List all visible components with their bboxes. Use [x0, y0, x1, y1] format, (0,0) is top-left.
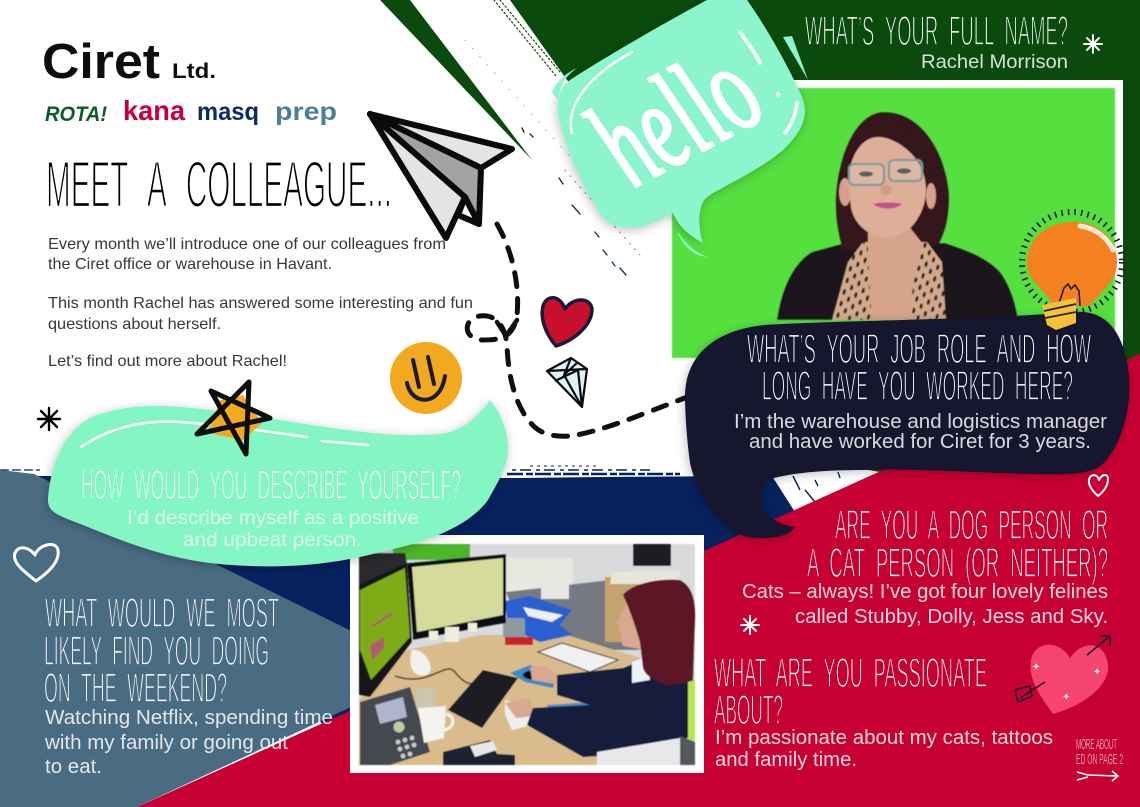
bulb glass	[1027, 222, 1117, 306]
answer: and have worked for Ciret for 3 years.	[749, 431, 1091, 453]
answer: I’m the warehouse and logistics manager	[734, 411, 1107, 433]
bulb base	[1042, 298, 1076, 330]
background shape: red triangle	[137, 354, 1140, 807]
question: weekend	[44, 589, 333, 778]
answer: I’d describe myself as a positive	[127, 507, 419, 529]
answer	[742, 581, 1108, 628]
brand logos	[45, 95, 337, 126]
icon: paper plane	[370, 114, 512, 238]
question: passionate	[714, 649, 1053, 771]
highlight	[571, 52, 632, 133]
intro text	[48, 236, 473, 370]
pink heart	[1031, 645, 1108, 714]
office photo	[359, 544, 695, 765]
bubble shape	[685, 312, 1129, 538]
bulb highlight	[1080, 226, 1113, 250]
sparkles: ✦	[1032, 662, 1040, 673]
speech bubble: describe yourself	[48, 400, 508, 566]
portrait photo	[672, 88, 1115, 358]
portrait photo frame	[664, 80, 1123, 366]
background shape: dark green corner	[510, 0, 1140, 472]
speech bubble: hello	[552, 0, 808, 257]
intro text: questions about herself.	[48, 316, 221, 333]
answer: with my family or going out	[44, 732, 288, 754]
intro text: This month Rachel has answered some interesting and fun	[48, 295, 473, 312]
answer	[127, 507, 419, 551]
answer: and family time.	[715, 749, 857, 771]
icon: star	[197, 382, 270, 454]
arrow	[1015, 636, 1110, 702]
logo: Ciret Ltd.: Ciret	[42, 35, 160, 89]
text: HOW WOULD YOU DESCRIBE YOURSELF?	[81, 461, 461, 508]
icon: asterisk white top	[1084, 35, 1102, 53]
answer	[715, 727, 1053, 771]
exclamation	[740, 32, 797, 133]
note: more on page 2	[1076, 736, 1123, 781]
answer: Watching Netflix, spending time	[45, 707, 333, 729]
arrow	[1077, 771, 1118, 781]
brand logos: ROTA!	[45, 103, 107, 126]
intro text: Every month we’ll introduce one of our colleagues from	[48, 236, 446, 253]
intro text: the Ciret office or warehouse in Havant.	[48, 256, 332, 273]
bulb rays	[1022, 212, 1122, 312]
icon: asterisk black	[38, 408, 60, 430]
bubble accent tail	[677, 230, 707, 257]
bubble highlights	[81, 422, 368, 447]
background detail: white wedge under bubble	[770, 468, 863, 512]
answer	[44, 707, 333, 778]
sparkles: ✦	[1093, 667, 1101, 678]
bubble accent left	[552, 68, 577, 100]
question: weekend: LIKELY FIND YOU DOING	[44, 627, 269, 674]
answer: to eat.	[45, 756, 102, 778]
question: full name	[805, 7, 1068, 73]
background shape: dark green sliver	[380, 0, 532, 160]
question: weekend: WHAT WOULD WE MOST	[45, 589, 279, 636]
intro text: Let’s find out more about Rachel!	[48, 353, 287, 370]
bubble shape	[558, 0, 805, 243]
background detail: wedge speckles	[793, 472, 840, 502]
icon: heart with arrow	[1015, 636, 1110, 714]
icon: red heart	[542, 298, 592, 346]
sparkles: ✦	[1062, 692, 1070, 703]
background detail: brush speckles	[465, 0, 640, 275]
office photo frame	[350, 535, 704, 773]
answer: I’m passionate about my cats, tattoos	[715, 727, 1053, 749]
background shape: navy band	[0, 476, 795, 730]
logo: Ciret Ltd.	[42, 35, 216, 89]
text: MEET A COLLEAGUE...	[46, 147, 392, 221]
arrow head on dashed path	[497, 320, 517, 336]
background shape: slate triangle	[0, 470, 430, 807]
icon: heart outline left	[14, 545, 58, 581]
heading: ON THE WEEKEND?	[44, 664, 227, 711]
bubble accent right	[783, 36, 808, 80]
note text	[1076, 736, 1123, 768]
logo: Ciret Ltd.: Ltd.	[172, 60, 216, 83]
dashed flight path	[467, 224, 690, 436]
icon: heart outline right	[1089, 475, 1108, 496]
star strokes	[197, 382, 270, 454]
question: passionate: ABOUT?	[714, 686, 783, 733]
icon: diamond	[547, 358, 587, 407]
answer: Rachel Morrison	[921, 51, 1068, 73]
brand logos: kana	[123, 95, 185, 126]
icon: asterisk white middle	[741, 616, 759, 634]
background detail: navy brush noise	[0, 466, 680, 474]
question: dog or cat	[742, 501, 1108, 628]
answer	[734, 411, 1107, 453]
icon: light bulb	[1022, 212, 1122, 330]
brand logos: prep	[275, 98, 337, 126]
bubble shape	[48, 400, 508, 566]
brand logos: masq	[197, 98, 259, 126]
answer: Cats – always! I’ve got four lovely felines	[742, 581, 1108, 603]
star fill	[208, 395, 262, 440]
answer: called Stubby, Dolly, Jess and Sky.	[795, 606, 1108, 628]
answer: and upbeat person.	[183, 529, 362, 551]
icon: smiley	[390, 342, 462, 414]
speech bubble: job role	[685, 312, 1129, 538]
bulb filament	[1058, 284, 1080, 306]
sparkles	[1032, 662, 1101, 703]
heading	[44, 589, 279, 711]
